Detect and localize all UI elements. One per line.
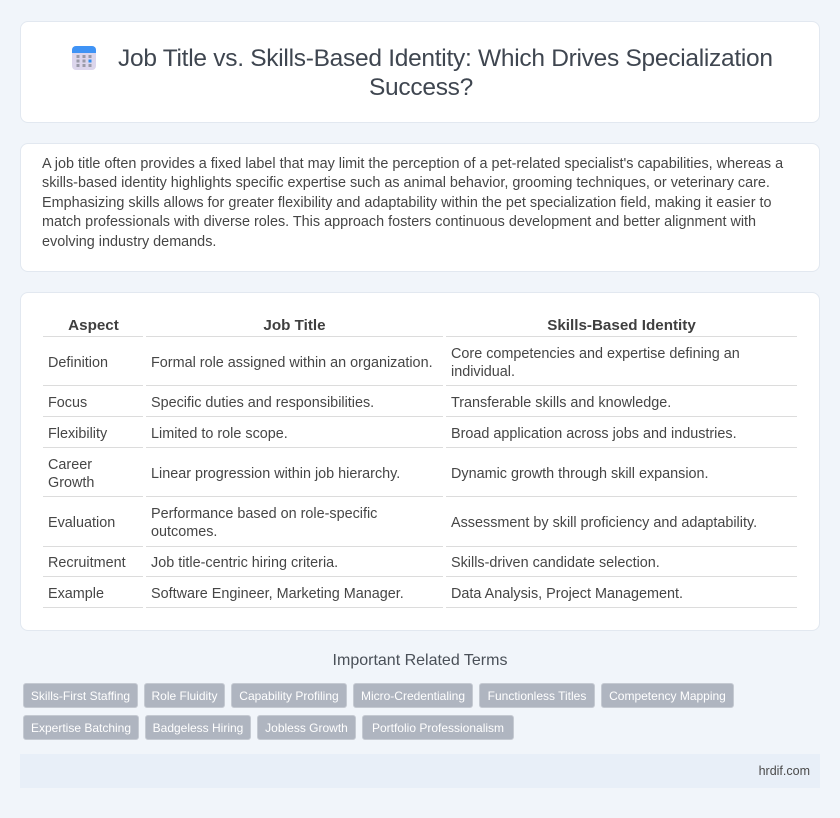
related terms tags: Expertise Batching xyxy=(31,721,131,735)
intro paragraph: match professionals with diverse roles. This approach fosters continuous development and better alignment with xyxy=(42,214,756,230)
comparison table: Job title-centric hiring criteria. xyxy=(151,555,338,571)
table header: Aspect xyxy=(68,317,119,334)
comparison table: Career xyxy=(48,457,92,473)
intro paragraph: A job title often provides a fixed label that may limit the perception of a pet-related specialist's capabilities, whereas a xyxy=(42,156,783,172)
comparison table: Recruitment xyxy=(48,555,126,571)
related terms heading: Important Related Terms xyxy=(333,652,507,669)
comparison table: Formal role assigned within an organization. xyxy=(151,355,433,371)
intro paragraph: Emphasizing skills allows for greater flexibility and adaptability within the pet specialization field, making it easier to xyxy=(42,195,771,211)
comparison table: individual. xyxy=(451,364,515,380)
intro paragraph: evolving industry demands. xyxy=(42,234,216,250)
table header: Skills-Based Identity xyxy=(547,317,696,334)
title: Job Title vs. Skills-Based Identity: Which Drives Specialization xyxy=(118,45,773,72)
footer xyxy=(20,754,820,788)
table header: Job Title xyxy=(263,317,326,334)
comparison table: Definition xyxy=(48,355,108,371)
comparison table: Example xyxy=(48,586,104,602)
footer source: hrdif.com xyxy=(759,764,810,778)
related terms tags: Role Fluidity xyxy=(151,689,218,703)
comparison table: Assessment by skill proficiency and adaptability. xyxy=(451,515,757,531)
comparison table: Performance based on role-specific xyxy=(151,506,377,522)
related terms tags: Functionless Titles xyxy=(488,689,586,703)
comparison table: Dynamic growth through skill expansion. xyxy=(451,466,709,482)
intro panel xyxy=(20,143,820,272)
comparison table: Limited to role scope. xyxy=(151,426,288,442)
comparison table: Specific duties and responsibilities. xyxy=(151,395,374,411)
related terms tags: Competency Mapping xyxy=(609,689,726,703)
related terms tags xyxy=(23,683,734,740)
comparison table: outcomes. xyxy=(151,524,217,540)
comparison table: Data Analysis, Project Management. xyxy=(451,586,683,602)
comparison table: Core competencies and expertise defining an xyxy=(451,346,740,362)
icon: calendar xyxy=(72,46,96,70)
related terms tags: Micro-Credentialing xyxy=(361,689,465,703)
table panel xyxy=(20,292,820,631)
comparison table xyxy=(43,317,797,608)
table header xyxy=(68,317,696,334)
title panel: Success? xyxy=(369,74,473,101)
related terms tags: Capability Profiling xyxy=(239,689,339,703)
comparison table: Flexibility xyxy=(48,426,107,442)
intro paragraph: skills-based identity highlights specific expertise such as animal behavior, grooming techniques, or veterinary care. xyxy=(42,175,770,191)
related terms tags: Skills-First Staffing xyxy=(31,689,130,703)
comparison table: Transferable skills and knowledge. xyxy=(451,395,671,411)
comparison table: Focus xyxy=(48,395,87,411)
intro paragraph xyxy=(42,156,784,250)
comparison table: Software Engineer, Marketing Manager. xyxy=(151,586,404,602)
related terms tags: Portfolio Professionalism xyxy=(372,721,504,735)
comparison table: Skills-driven candidate selection. xyxy=(451,555,660,571)
comparison table: Growth xyxy=(48,475,94,491)
title panel xyxy=(20,21,820,123)
related terms tags: Jobless Growth xyxy=(265,721,348,735)
comparison table: Broad application across jobs and industries. xyxy=(451,426,737,442)
comparison table: Evaluation xyxy=(48,515,115,531)
related terms tags: Badgeless Hiring xyxy=(153,721,243,735)
comparison table: Linear progression within job hierarchy. xyxy=(151,466,400,482)
